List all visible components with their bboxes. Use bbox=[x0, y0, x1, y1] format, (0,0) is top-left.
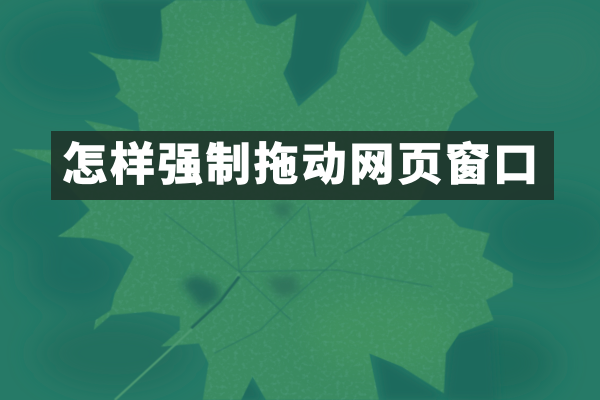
title band bbox=[51, 131, 554, 200]
title text: 怎样强制拖动网页窗口 bbox=[62, 139, 541, 190]
dark leaf patches and veins bbox=[115, 200, 432, 400]
